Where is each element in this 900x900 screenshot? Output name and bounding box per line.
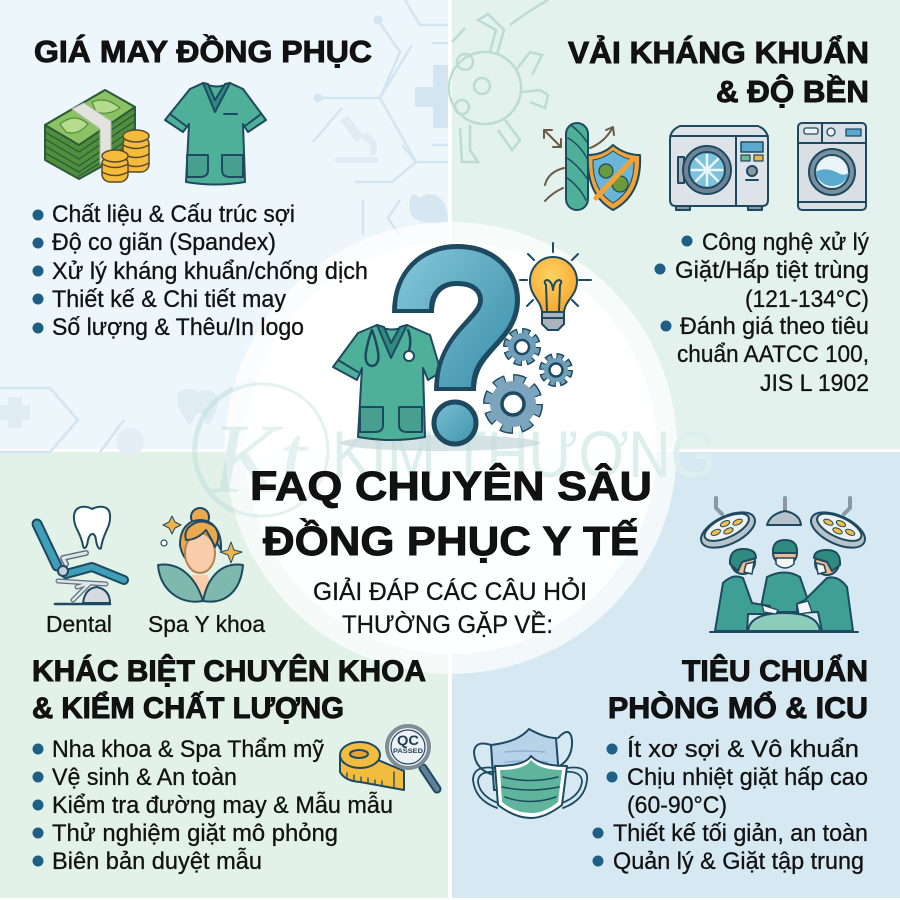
- list: giá may: Số lượng & Thêu/In logo: [52, 314, 304, 341]
- label: spa y khoa: Spa Y khoa: [148, 611, 265, 637]
- label: dental: Dental: [46, 611, 112, 637]
- title: [250, 463, 652, 564]
- list: chuyên khoa: Kiểm tra đường may & Mẫu mẫu: [52, 792, 393, 819]
- icon: fabric fibre and shield: [544, 123, 640, 210]
- heading: tiêu chuẩn phòng mổ: TIÊU CHUẨN: [682, 654, 868, 688]
- panel: bottom-right background: [452, 452, 900, 898]
- heading: khác biệt chuyên khoa: KHÁC BIỆT CHUYÊN KHOA: [32, 654, 426, 688]
- icon: surgical masks: [473, 729, 587, 818]
- label: QC passed: QC: [397, 733, 419, 748]
- list: tiêu chuẩn: Quản lý & Giặt tập trung: [613, 848, 864, 875]
- list: tiêu chuẩn: Ít xơ sợi & Vô khuẩn: [627, 736, 859, 763]
- label: QC passed: PASSED: [393, 748, 423, 755]
- list: giá may: Độ co giãn (Spandex): [52, 229, 276, 256]
- icon: central shadow: [340, 435, 540, 451]
- icon: surgeons at operating table: [710, 540, 858, 632]
- list: chuyên khoa: Thử nghiệm giặt mô phỏng: [52, 820, 338, 847]
- list: vải kháng khuẩn: chuẩn AATCC 100,: [677, 341, 869, 368]
- list: tiêu chuẩn: (60-90°C): [627, 792, 727, 819]
- watermark: brand name: KIM THƯƠNG: [332, 417, 716, 491]
- list: vải kháng khuẩn: Công nghệ xử lý: [702, 229, 869, 256]
- icon: light bulb: [520, 243, 591, 330]
- heading: giá may đồng phục: GIÁ MAY ĐỒNG PHỤC: [34, 33, 372, 69]
- list: tiêu chuẩn: Thiết kế tối giản, an toàn: [613, 820, 868, 847]
- panel: top-left background: [0, 0, 448, 449]
- panel: top-right background: [452, 0, 900, 449]
- list: vải kháng khuẩn: [654, 229, 869, 397]
- icon: money stack and coins: [45, 90, 149, 182]
- list: giá may: [32, 201, 368, 341]
- icon: washing machine: [798, 123, 866, 210]
- list: vải kháng khuẩn: JIS L 1902: [760, 370, 869, 397]
- heading: vải kháng khuẩn: VẢI KHÁNG KHUẨN: [568, 35, 869, 70]
- heading: khác biệt chuyên khoa: [32, 654, 426, 725]
- heading: vải kháng khuẩn: [568, 35, 869, 109]
- heading: tiêu chuẩn phòng mổ: PHÒNG MỔ & ICU: [608, 691, 868, 725]
- subtitle: GIẢI ĐÁP CÁC CÂU HỎI: [313, 576, 587, 606]
- panel: bottom-left background: [0, 452, 448, 898]
- watermark: Kim Thuong logo: Kt: [210, 403, 309, 514]
- logo mark over circle: [196, 384, 328, 516]
- subtitle: THƯỜNG GẶP VỀ:: [342, 610, 553, 639]
- list: tiêu chuẩn: Chịu nhiệt giặt hấp cao: [627, 764, 868, 791]
- label: QC passed: [393, 733, 423, 755]
- icon: spa woman and leaves: [158, 508, 243, 602]
- icon: dental chair and tooth: [37, 507, 124, 604]
- list: tiêu chuẩn: [592, 736, 868, 875]
- icon: green scrub shirt: [165, 83, 266, 184]
- list: chuyên khoa: Vệ sinh & An toàn: [52, 764, 237, 791]
- icon: measuring tape and QC magnifier: [340, 726, 437, 790]
- heading: tiêu chuẩn phòng mổ: [608, 654, 868, 725]
- list: giá may: Xử lý kháng khuẩn/chống dịch: [52, 258, 368, 285]
- icon: autoclave: [670, 126, 768, 210]
- list: chuyên khoa: Biên bản duyệt mẫu: [52, 848, 262, 875]
- icon: scrub with stethoscope: [333, 325, 441, 440]
- icon: question mark: [413, 265, 499, 444]
- watermark: Kim Thuong logo: [194, 382, 330, 518]
- logo mark over circle: Kt: [210, 403, 309, 514]
- list: giá may: Thiết kế & Chi tiết may: [52, 286, 286, 313]
- title: FAQ CHUYÊN SÂU: [250, 463, 652, 509]
- heading: khác biệt chuyên khoa: & KIỂM CHẤT LƯỢNG: [32, 691, 344, 725]
- list: vải kháng khuẩn: (121-134°C): [745, 286, 869, 313]
- icon: gears: [490, 333, 568, 427]
- list: giá may: Chất liệu & Cấu trúc sợi: [52, 201, 295, 228]
- icon: surgical lamps: [696, 498, 870, 555]
- heading: vải kháng khuẩn: & ĐỘ BỀN: [716, 73, 869, 109]
- list: vải kháng khuẩn: Giặt/Hấp tiệt trùng: [675, 257, 869, 284]
- list: chuyên khoa: [32, 736, 393, 875]
- center white circle: [225, 222, 677, 674]
- subtitle: [313, 576, 587, 639]
- list: vải kháng khuẩn: Đánh giá theo tiêu: [680, 313, 869, 340]
- list: chuyên khoa: Nha khoa & Spa Thẩm mỹ: [52, 736, 324, 763]
- title: ĐỒNG PHỤC Y TẾ: [263, 518, 639, 564]
